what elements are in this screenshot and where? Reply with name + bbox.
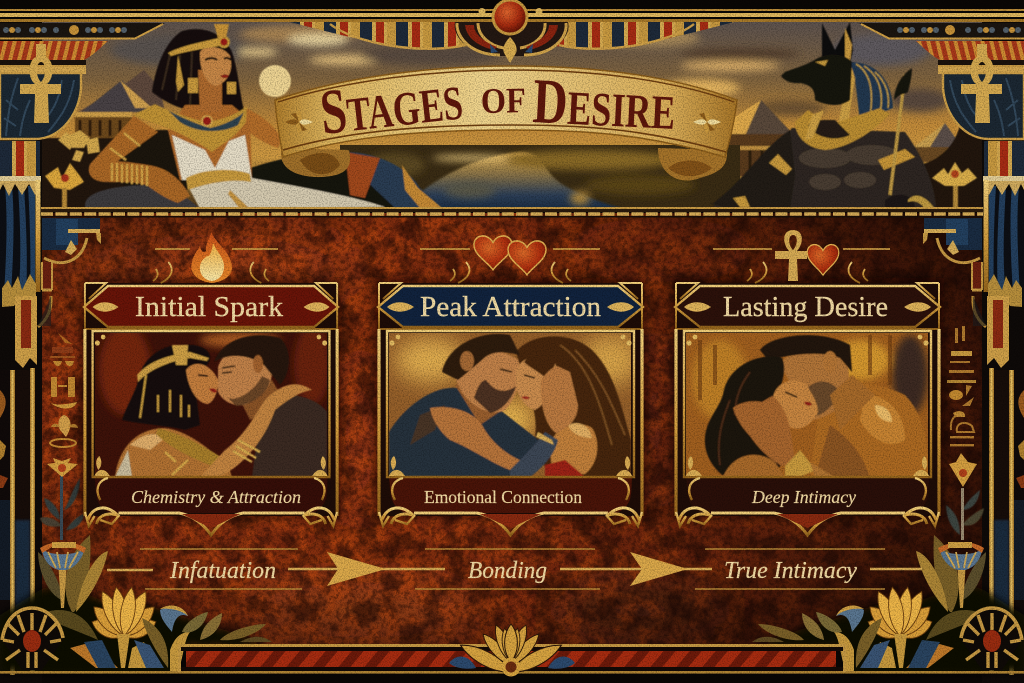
photo: Cleopatra and lover bbox=[95, 325, 330, 477]
woman's hair bbox=[705, 357, 785, 475]
stage card: Peak Attraction bbox=[374, 236, 647, 535]
title word: Stages: STAGES bbox=[317, 63, 466, 149]
bracelets bbox=[110, 133, 147, 186]
woman's hand bbox=[733, 396, 795, 466]
woman's shoulder bbox=[115, 428, 232, 477]
right lotus stalk bbox=[946, 453, 984, 540]
bottom centre lotus bbox=[449, 623, 575, 678]
near arm bbox=[89, 116, 190, 203]
woman's hair bbox=[122, 345, 210, 430]
man's torso bbox=[252, 395, 327, 477]
icon: two hearts bbox=[474, 236, 546, 275]
top gold frame lines bbox=[0, 9, 1024, 22]
man's neck bbox=[830, 375, 875, 430]
icon divider lines: spark bbox=[155, 248, 278, 250]
title word: of: OF bbox=[480, 81, 526, 121]
heading: Peak Attraction: Peak Attraction bbox=[420, 291, 602, 323]
collar bbox=[133, 104, 247, 152]
lower left plants bbox=[0, 535, 272, 672]
hair back bbox=[152, 29, 244, 113]
left side column bbox=[0, 22, 165, 683]
top centre jewel crest bbox=[290, 0, 734, 63]
caption: Deep Intimacy: Deep Intimacy bbox=[751, 487, 856, 507]
shadow behind arm bbox=[122, 129, 190, 190]
icon divider lines: ankh bbox=[713, 248, 890, 250]
draped fabric bbox=[350, 152, 438, 207]
icon: heart bbox=[807, 245, 839, 275]
woman's face bbox=[516, 356, 556, 410]
stage label: True Intimacy: True Intimacy bbox=[724, 558, 857, 584]
bracelet and forearm bbox=[785, 450, 816, 477]
white dress bbox=[172, 135, 252, 180]
stage label: Infatuation: Infatuation bbox=[169, 558, 276, 584]
caption: Chemistry & Attraction: Chemistry & Attraction bbox=[131, 487, 301, 507]
man's torso bbox=[810, 382, 928, 477]
Nile river and banks bbox=[340, 145, 740, 209]
right hieroglyphs bbox=[947, 326, 976, 446]
Anubis bbox=[710, 22, 936, 209]
stage card: Initial Spark bbox=[80, 232, 342, 535]
woman's face bbox=[773, 380, 818, 429]
woman's face bbox=[186, 364, 218, 404]
left hieroglyphs bbox=[50, 333, 78, 447]
right side column bbox=[859, 22, 1024, 683]
header scene: sunset landscape bbox=[0, 22, 1024, 209]
progression timeline bbox=[107, 549, 922, 589]
photo: intimate couple bbox=[686, 333, 928, 477]
man's neck bbox=[456, 384, 499, 424]
arm around neck bbox=[200, 384, 312, 477]
bottom gold border bbox=[0, 644, 1024, 674]
lower right plants bbox=[752, 535, 1024, 672]
woman's sleeve and bracelet bbox=[510, 432, 558, 477]
woman's shoulder bbox=[723, 455, 785, 477]
stage label: Bonding: Bonding bbox=[468, 558, 547, 584]
man's face bbox=[218, 348, 272, 405]
woman's hand on his face bbox=[541, 366, 578, 433]
title word: Desire: DESIRE bbox=[531, 67, 677, 144]
arrow: bonding to true intimacy bbox=[560, 552, 712, 586]
man's hand bbox=[430, 407, 525, 470]
raised far arm bbox=[246, 109, 280, 148]
right lotus bbox=[932, 162, 977, 208]
banner ornament right bbox=[693, 110, 721, 134]
stage card: Lasting Desire bbox=[671, 230, 944, 535]
card frame bbox=[675, 262, 940, 535]
caption: Emotional Connection: Emotional Connection bbox=[424, 487, 582, 507]
icon: ankh bbox=[775, 230, 807, 281]
card frame bbox=[378, 262, 643, 535]
title scroll curls bbox=[281, 148, 727, 181]
title banner bbox=[275, 63, 737, 157]
right distant pyramids and temples bbox=[729, 100, 982, 207]
torso bbox=[168, 105, 252, 180]
icon divider lines: hearts bbox=[420, 248, 600, 250]
card frame bbox=[84, 262, 338, 535]
man's face bbox=[450, 351, 520, 412]
left mountains and pyramid bbox=[40, 70, 165, 209]
right ankh bbox=[961, 44, 1002, 123]
icon: flame bbox=[191, 232, 232, 283]
Cleopatra bbox=[85, 24, 442, 209]
banner ornament left bbox=[285, 110, 313, 134]
heading: Lasting Desire: Lasting Desire bbox=[723, 291, 888, 323]
neck and face bbox=[198, 70, 222, 112]
photo: embracing couple bbox=[389, 333, 640, 477]
flowers by Cleopatra bbox=[45, 130, 100, 208]
woman's hair bbox=[516, 336, 631, 477]
woman's shoulder bbox=[550, 424, 597, 474]
headdress bbox=[167, 38, 220, 57]
left ankh bbox=[20, 44, 61, 123]
cushion bbox=[85, 185, 200, 209]
headband bbox=[137, 352, 209, 382]
collar bbox=[156, 428, 220, 465]
man's head bbox=[780, 348, 850, 420]
belt bbox=[186, 170, 251, 190]
left lotus stalk bbox=[40, 458, 85, 540]
man's torso bbox=[389, 388, 545, 477]
main rust red panel bbox=[36, 213, 988, 649]
sun bbox=[259, 65, 291, 97]
heading: Initial Spark: Initial Spark bbox=[135, 291, 284, 323]
beaded divider under header bbox=[41, 207, 983, 218]
arrow: infatuation to bonding bbox=[288, 552, 445, 586]
man's neck bbox=[242, 380, 278, 420]
